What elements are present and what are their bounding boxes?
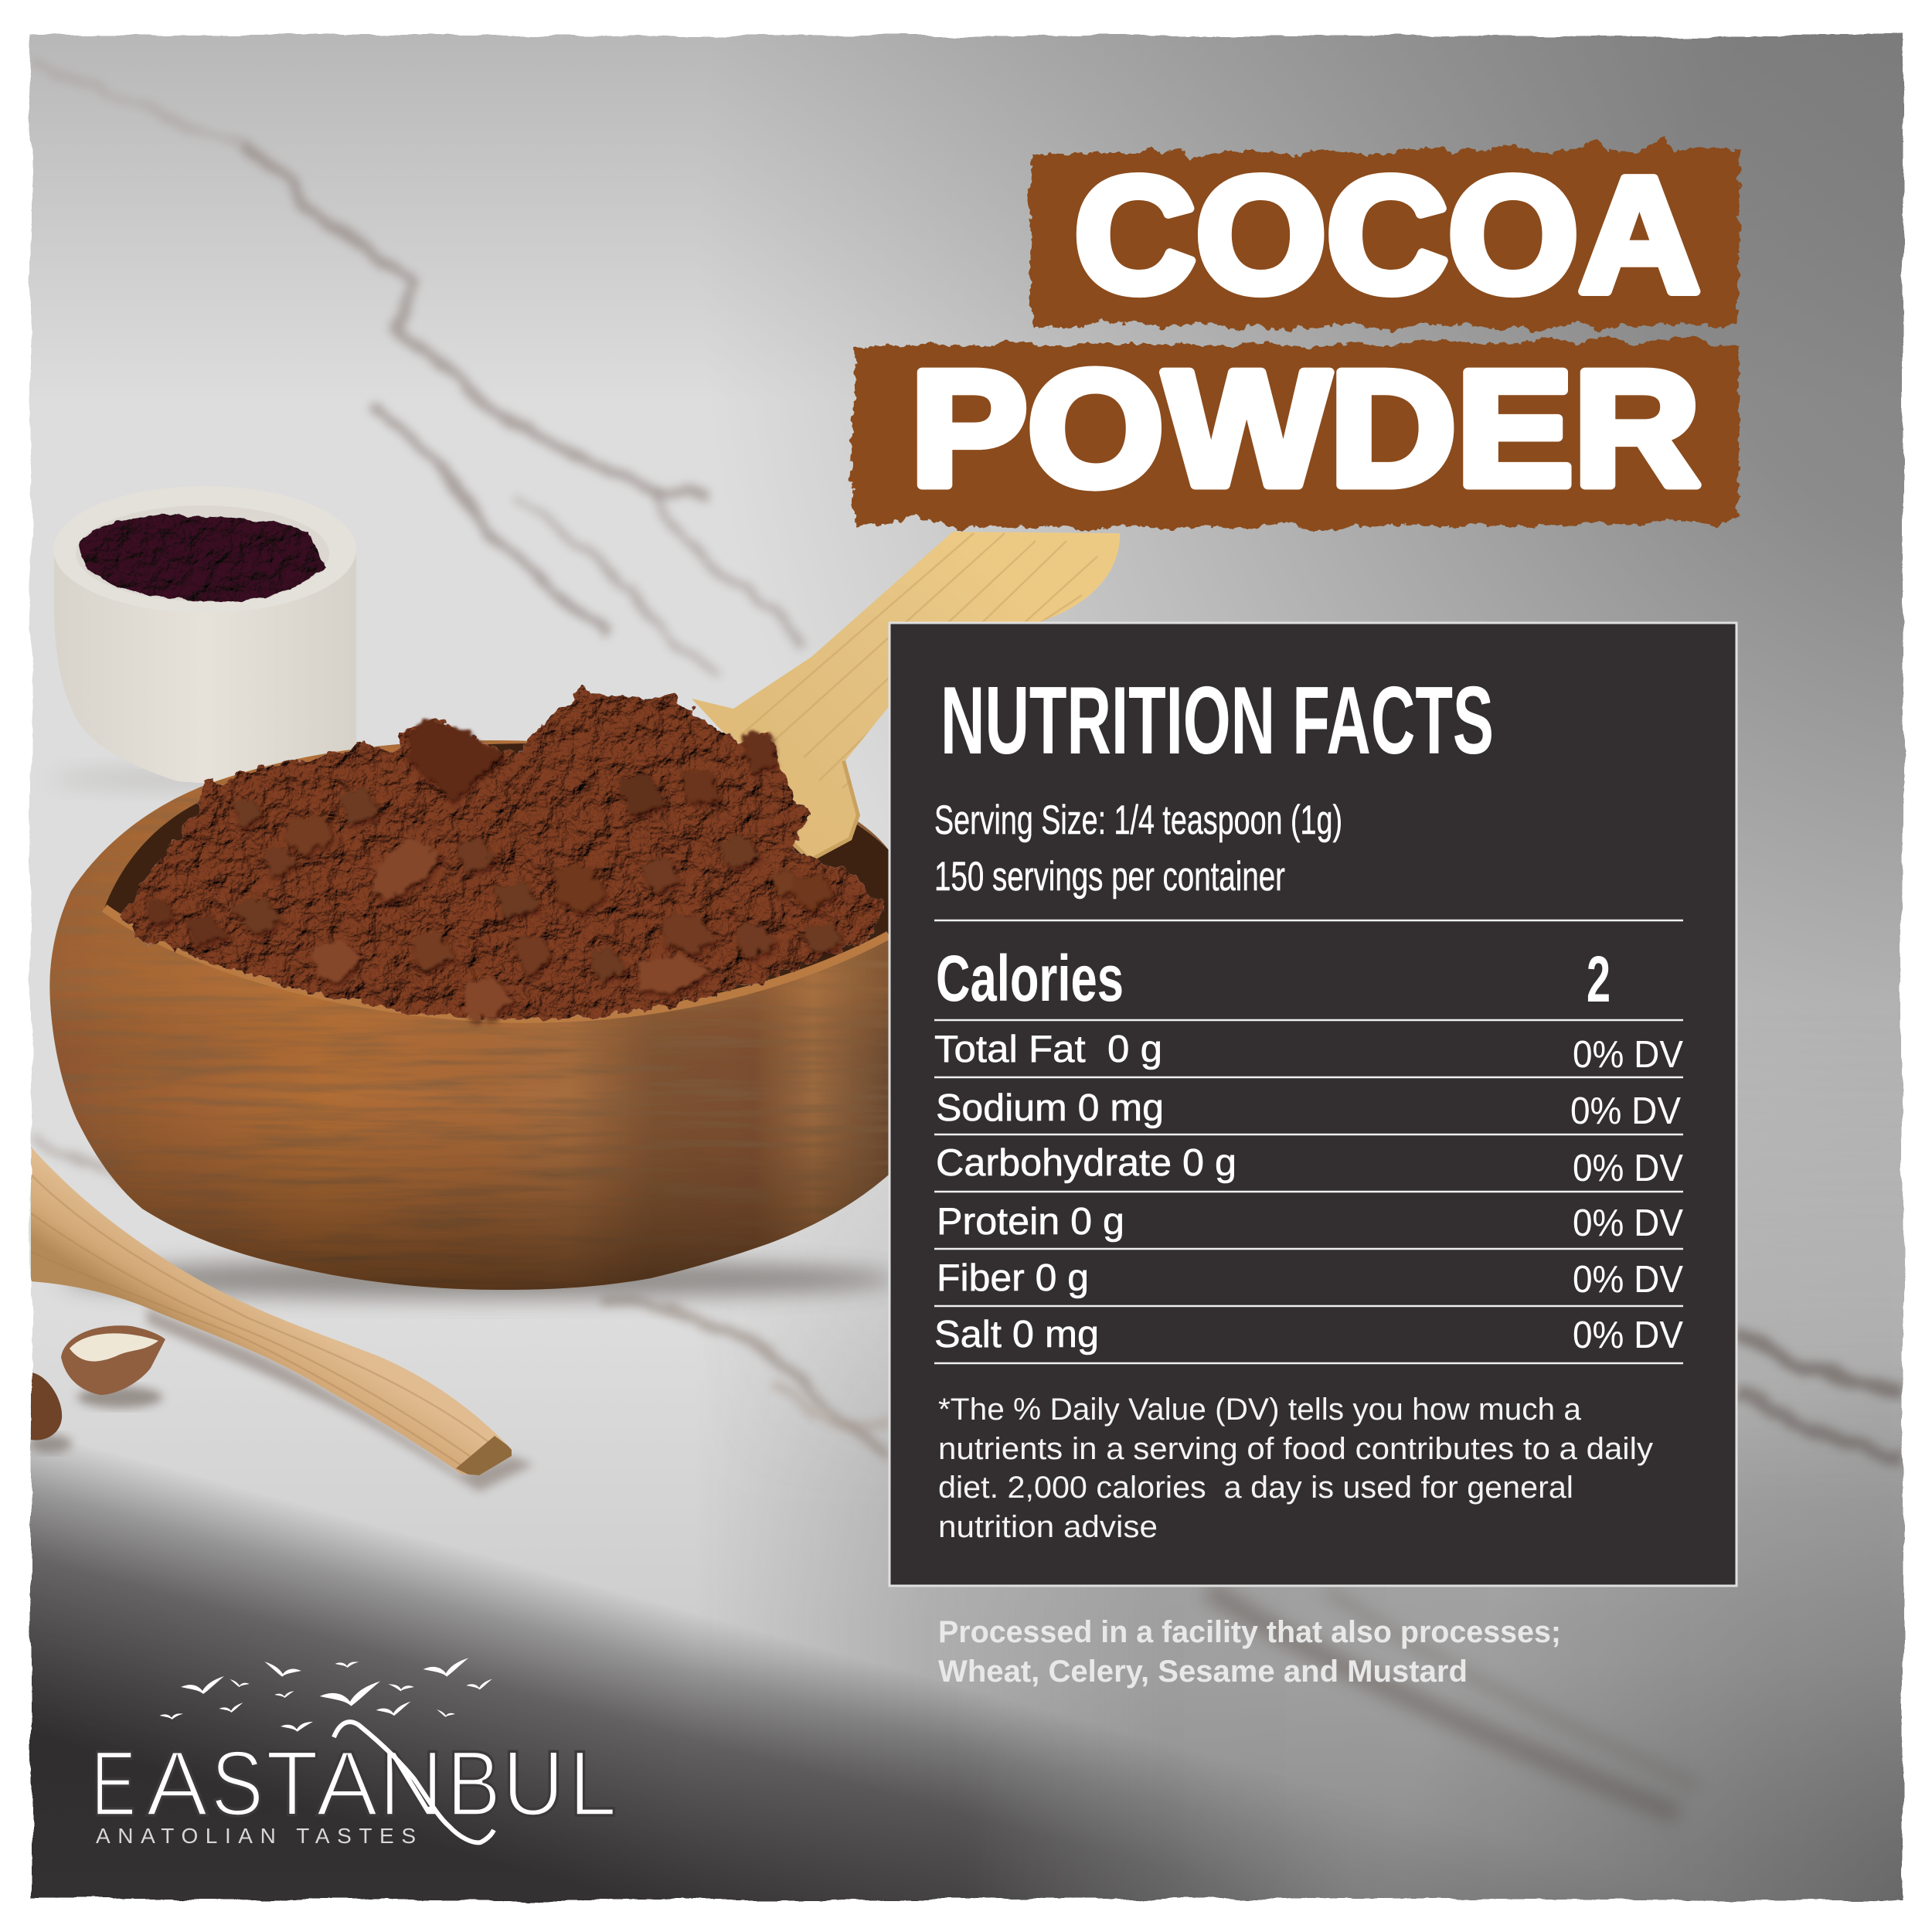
footnote (938, 1393, 1653, 1544)
daily value column: 0% DV (1570, 1090, 1681, 1132)
logo wordmark: T (266, 1732, 318, 1835)
hazelnut shell (61, 1325, 165, 1408)
daily value column: 0% DV (1573, 1315, 1683, 1356)
nutrient rows (934, 1029, 1236, 1355)
divider lines (934, 920, 1683, 1363)
bowl cast shadow (62, 1259, 896, 1299)
logo swash (334, 1722, 494, 1842)
daily value column: 0% DV (1573, 1148, 1683, 1189)
powder clumps (147, 720, 842, 1017)
panel: nutrition facts (889, 623, 1736, 1586)
daily value column (1570, 1034, 1683, 1356)
allergen statement (938, 1615, 1561, 1689)
nutrient rows: Salt 0 mg (934, 1314, 1099, 1355)
bowl inner wall (104, 743, 889, 1019)
bowl front rim highlight (104, 908, 889, 1019)
daily value column: 0% DV (1573, 1034, 1683, 1076)
logo: Eastanbul (91, 1658, 617, 1848)
logo wordmark: S (211, 1732, 264, 1835)
footnote: diet. 2,000 calories a day is used for general (938, 1471, 1573, 1505)
nutrient rows: Protein 0 g (937, 1201, 1124, 1243)
title text: COCOA: COCOA (1074, 143, 1700, 326)
serving info: 150 servings per container (934, 854, 1285, 900)
allergen statement: Processed in a facility that also processes; (938, 1615, 1561, 1649)
logo wordmark: A (316, 1732, 378, 1835)
serving info: Serving Size: 1/4 teaspoon (1g) (934, 798, 1342, 843)
icon: flock of birds (160, 1658, 492, 1732)
nutrient rows: Sodium 0 mg (936, 1087, 1164, 1129)
nutrient rows: Fiber 0 g (937, 1257, 1089, 1299)
logo wordmark: A (146, 1732, 208, 1835)
daily value column: 0% DV (1573, 1259, 1683, 1301)
allergen statement: Wheat, Celery, Sesame and Mustard (938, 1655, 1468, 1689)
footnote: *The % Daily Value (DV) tells you how much a (938, 1393, 1582, 1427)
title band: COCOA (1029, 138, 1740, 332)
logo tagline: ANATOLIAN TASTES (96, 1824, 416, 1848)
wooden spatula (23, 1136, 533, 1492)
calories row (936, 942, 1611, 1015)
logo wordmark: U (502, 1732, 564, 1835)
nutrient rows: Carbohydrate 0 g (936, 1142, 1236, 1184)
ramekin with dark berry powder (50, 486, 359, 790)
wooden bowl (49, 740, 889, 1290)
title text: POWDER: POWDER (910, 337, 1700, 519)
footnote: nutrition advise (938, 1510, 1158, 1544)
wooden spoon in bowl (680, 518, 1144, 873)
calories row: 2 (1587, 943, 1611, 1015)
hazelnut (29, 1372, 72, 1453)
daily value column: 0% DV (1573, 1202, 1683, 1244)
calories row: Calories (936, 942, 1124, 1015)
logo wordmark: B (447, 1732, 501, 1835)
logo wordmark: E (91, 1732, 136, 1835)
serving info (934, 798, 1342, 900)
nutrient rows: Total Fat 0 g (934, 1029, 1162, 1070)
cocoa powder heap (121, 688, 886, 1019)
heading: nutrition facts: NUTRITION FACTS (940, 668, 1494, 774)
logo wordmark: N (379, 1732, 444, 1835)
title band: POWDER (850, 335, 1740, 532)
logo wordmark: L (569, 1732, 617, 1835)
footnote: nutrients in a serving of food contributes to a daily (938, 1432, 1653, 1466)
